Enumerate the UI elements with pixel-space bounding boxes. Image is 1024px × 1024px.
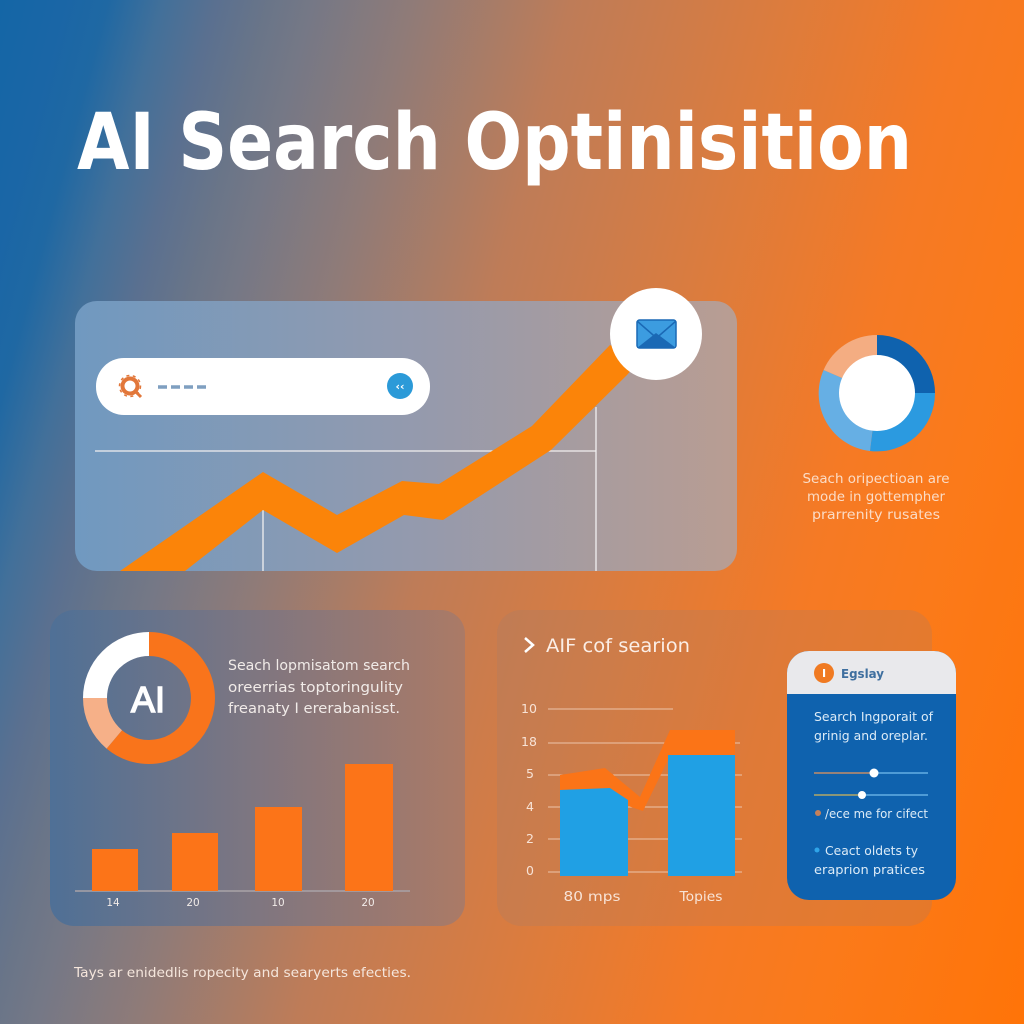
y axis labels: 4: [526, 799, 534, 814]
donut caption: prarrenity rusates: [812, 508, 940, 523]
y axis labels: 2: [526, 831, 534, 846]
bar labels: 20: [361, 897, 375, 909]
list item: blue bullet: Ceact oldets ty: [825, 843, 919, 858]
sliders: [814, 768, 928, 799]
card title: Egslay: [841, 667, 884, 681]
icon: magnifier gear: [120, 376, 141, 397]
panel: AI overview: [50, 610, 465, 926]
y axis labels: 5: [526, 766, 534, 781]
y axis labels: [521, 701, 537, 878]
chart heading: AIF cof searion: [546, 635, 690, 657]
y axis labels: 10: [521, 701, 537, 716]
orange series: [560, 730, 735, 811]
panel: search trend chart: [75, 288, 737, 571]
icon: envelope badge: [610, 288, 702, 380]
grid lines: [548, 709, 742, 872]
description text: [228, 658, 410, 717]
donut chart: right: [819, 335, 935, 451]
donut caption: Seach oripectioan are: [802, 472, 950, 487]
y axis labels: 18: [521, 734, 537, 749]
donut caption: mode in gottempher: [807, 490, 946, 505]
card text: Search Ingporait of: [814, 709, 934, 724]
search button: [387, 373, 413, 399]
footer note: Tays ar enidedlis ropecity and searyerts efecties.: [73, 965, 411, 981]
description text: Seach lopmisatom search: [228, 658, 410, 674]
list item: blue bullet: eraprion pratices: [814, 862, 925, 877]
AI donut: [95, 644, 203, 752]
bar chart: [75, 764, 410, 909]
card text: [814, 709, 934, 743]
description text: freanaty I ererabanisst.: [228, 701, 400, 717]
orange trend line: [120, 345, 640, 571]
list item: blue bullet: [814, 843, 925, 877]
chart grid lines: [95, 407, 596, 571]
card header: [787, 651, 956, 694]
description text: oreerrias toptoringulity: [228, 680, 403, 696]
list item: orange bullet: /ece me for cifect: [825, 807, 928, 821]
x axis labels: [564, 889, 722, 905]
icon: info badge: [814, 663, 834, 683]
icon: info badge: I: [822, 667, 826, 680]
x axis labels: Topies: [678, 889, 722, 905]
y axis labels: 0: [526, 863, 534, 878]
bar labels: 10: [271, 897, 285, 909]
search bar: [96, 358, 430, 415]
bar labels: [106, 897, 375, 909]
bar labels: 14: [106, 897, 120, 909]
blue bars: [560, 755, 735, 876]
donut caption: [802, 472, 950, 523]
panel: blue info card: [787, 651, 956, 900]
search placeholder dashes: [158, 385, 208, 389]
panel: search comparison chart: [497, 610, 932, 926]
card text: grinig and oreplar.: [814, 728, 928, 743]
search button: ‹‹: [395, 380, 405, 393]
title: AI Search Optinisition: [77, 98, 912, 188]
x axis labels: 80 mps: [564, 889, 620, 905]
bar labels: 20: [186, 897, 200, 909]
AI label: AI: [131, 679, 165, 720]
